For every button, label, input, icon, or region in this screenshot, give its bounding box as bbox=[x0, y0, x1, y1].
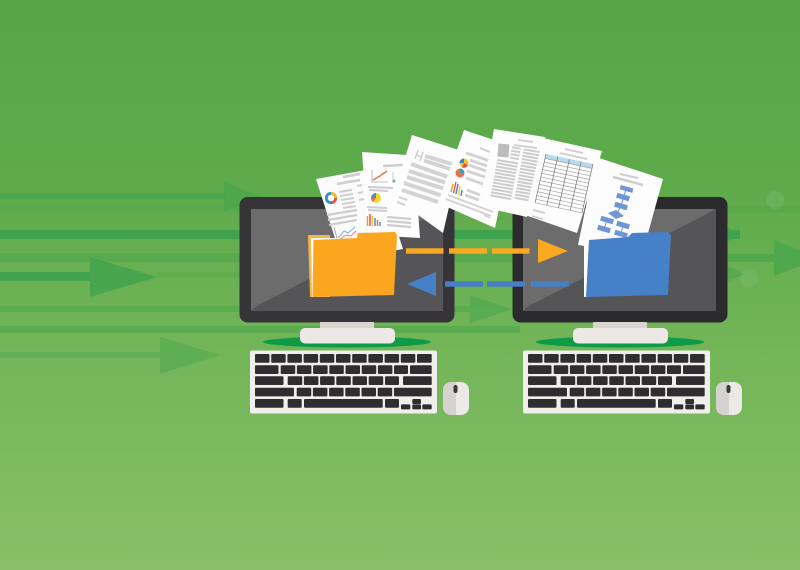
monitor: left bbox=[240, 197, 454, 329]
arrow: blue dashed left bbox=[407, 272, 569, 296]
keyboard: right bbox=[523, 350, 710, 414]
document: spreadsheet table bbox=[525, 138, 602, 233]
document: pie charts and bars bbox=[438, 130, 512, 228]
mouse: right bbox=[716, 382, 742, 415]
stand: left bbox=[263, 328, 431, 348]
document: report with donut chart bbox=[316, 168, 403, 260]
document: flowchart bbox=[578, 157, 663, 255]
background arrows and stripes bbox=[0, 182, 800, 374]
folder: orange bbox=[308, 232, 397, 297]
document: text page bbox=[393, 135, 462, 233]
keyboard: left bbox=[250, 350, 437, 414]
computer: right bbox=[512, 197, 742, 415]
arrow: orange dashed right bbox=[406, 239, 568, 263]
monitor: right bbox=[512, 197, 728, 329]
mouse: left bbox=[443, 382, 469, 415]
stand: right bbox=[536, 328, 704, 348]
folder: blue bbox=[584, 232, 671, 297]
document: line and pie charts bbox=[362, 152, 420, 238]
document: two column article bbox=[480, 129, 545, 217]
documents flying between folders bbox=[316, 129, 663, 260]
computer: left bbox=[240, 197, 469, 415]
